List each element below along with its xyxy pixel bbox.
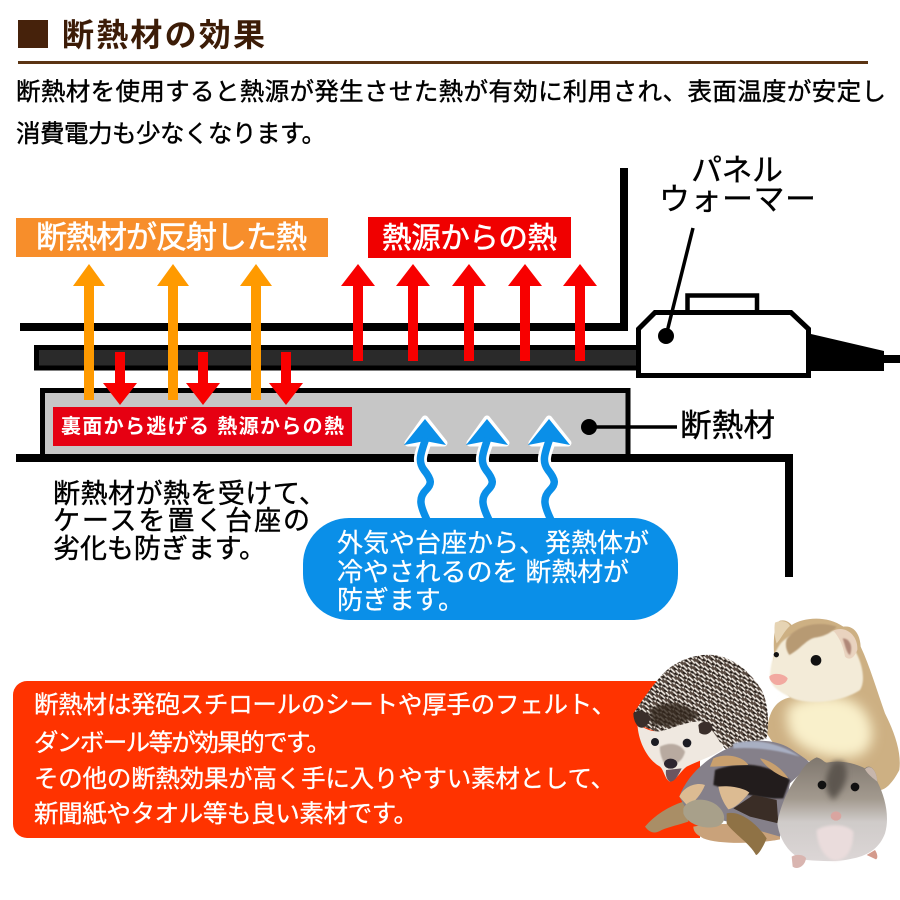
pointer: insulation <box>581 419 677 435</box>
blue wavy arrows <box>404 419 570 522</box>
text: protects the stand: 断熱材が熱を受けて、 <box>53 479 326 509</box>
small animals illustration <box>633 619 900 868</box>
intro text <box>16 78 886 148</box>
pointer: panel warmer <box>658 228 693 344</box>
insulation board <box>42 390 628 456</box>
white background behind animals <box>700 681 900 838</box>
orange arrows: reflected heat <box>73 264 272 400</box>
label: heat escaping from back <box>53 407 352 446</box>
text: protects the stand <box>53 479 326 564</box>
blue callout: 冷やされるのを 断熱材が <box>337 557 629 587</box>
intro text: 断熱材を使用すると熱源が発生させた熱が有効に利用され、表面温度が安定し <box>16 78 886 106</box>
heading <box>18 17 868 64</box>
hamster <box>777 757 887 868</box>
label: panel warmer: ウォーマー <box>659 182 816 217</box>
hedgehog <box>633 655 768 782</box>
red arrows: downward heat <box>103 352 303 405</box>
blue callout: 防ぎます。 <box>337 585 464 615</box>
label: insulation: 断熱材 <box>680 407 775 443</box>
heading: 断熱材の効果 <box>62 17 265 53</box>
panel heater <box>36 348 640 368</box>
ferret <box>767 619 900 790</box>
blue callout: 外気や台座から、発熱体が <box>337 528 649 558</box>
orange-red note panel: その他の断熱効果が高く手に入りやすい素材として、 <box>34 765 615 793</box>
red arrows: upward heat <box>341 264 597 361</box>
orange-red note panel: 断熱材は発砲スチロールのシートや厚手のフェルト、 <box>34 691 616 719</box>
label: heat from source <box>368 217 571 258</box>
orange-red note panel: 新聞紙やタオル等も良い素材です。 <box>34 800 418 828</box>
panel warmer controller <box>638 296 900 376</box>
blue callout <box>303 518 678 620</box>
orange-red note panel <box>13 681 700 838</box>
intro text: 消費電力も少なくなります。 <box>16 120 326 148</box>
label: panel warmer: パネル <box>691 153 783 188</box>
orange-red note panel: ダンボール等が効果的です。 <box>34 729 331 757</box>
base stand line <box>16 458 789 577</box>
label: heat escaping from back: 裏面から逃げる 熱源からの熱 <box>61 415 344 438</box>
text: protects the stand: 劣化も防ぎます。 <box>53 534 266 564</box>
text: protects the stand: ケースを置く台座の <box>53 506 310 536</box>
case wall lines <box>20 168 628 331</box>
label: reflected heat: 断熱材が反射した熱 <box>36 220 307 255</box>
label: panel warmer <box>659 153 816 217</box>
label: heat from source: 熱源からの熱 <box>382 222 557 255</box>
tortoise <box>645 741 811 855</box>
